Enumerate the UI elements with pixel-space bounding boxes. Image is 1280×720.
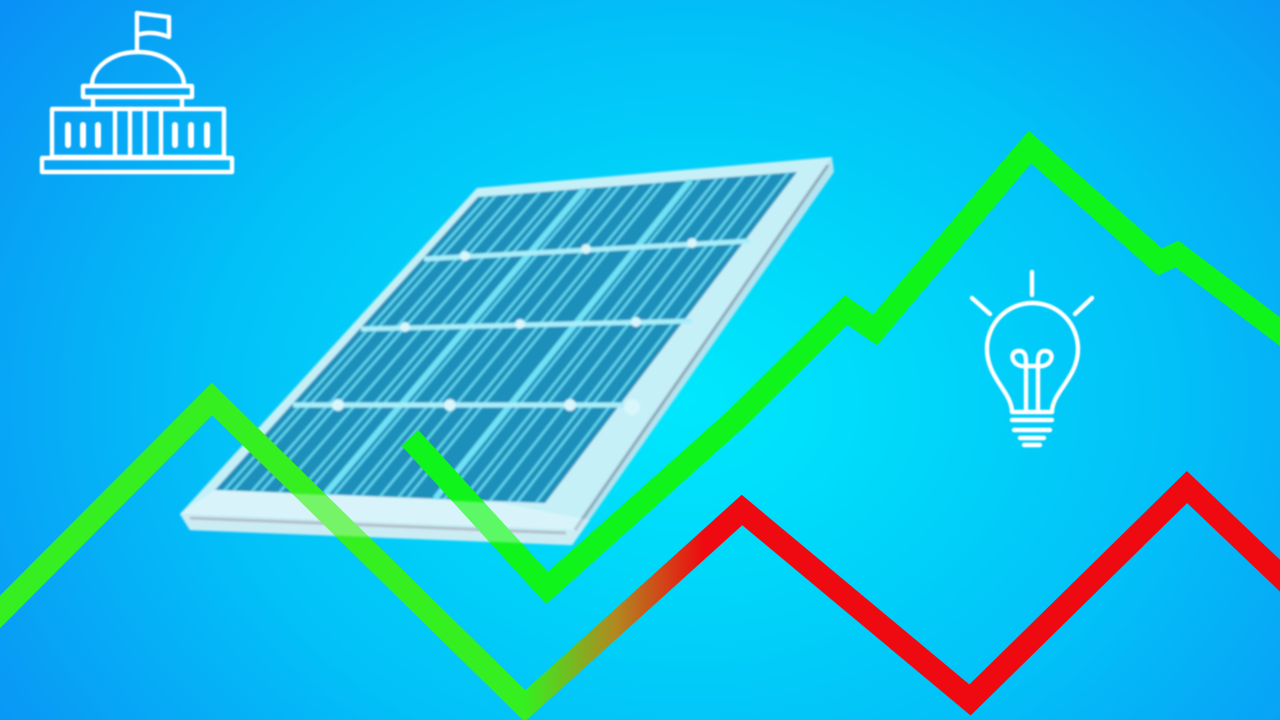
- windows: [68, 125, 207, 145]
- dome: [92, 52, 184, 85]
- green rising line: [410, 147, 1280, 588]
- cornice: [83, 86, 192, 97]
- filament: [1012, 351, 1052, 412]
- rays: [972, 272, 1092, 314]
- junction dots: [332, 238, 697, 415]
- panel frame thickness: [180, 157, 834, 545]
- row gaps: [293, 241, 750, 405]
- flag: [137, 13, 169, 52]
- green and red price line: [0, 399, 1280, 706]
- icon: capitol building: [42, 13, 232, 172]
- screw base: [1012, 420, 1052, 445]
- panel right edge: [575, 165, 828, 530]
- icon: light bulb: [972, 272, 1092, 445]
- panel frame edge: [190, 518, 566, 533]
- panel frame: [180, 157, 832, 530]
- building body: [52, 109, 224, 157]
- drum: [93, 97, 182, 108]
- solar cells: [215, 172, 797, 503]
- cell stripes: [224, 173, 788, 503]
- columns: [115, 109, 161, 157]
- panel bottom frame overlay: [180, 490, 590, 545]
- base: [42, 158, 232, 172]
- bulb outline: [987, 303, 1078, 412]
- column gaps: [325, 180, 691, 499]
- solar panel: [180, 157, 834, 545]
